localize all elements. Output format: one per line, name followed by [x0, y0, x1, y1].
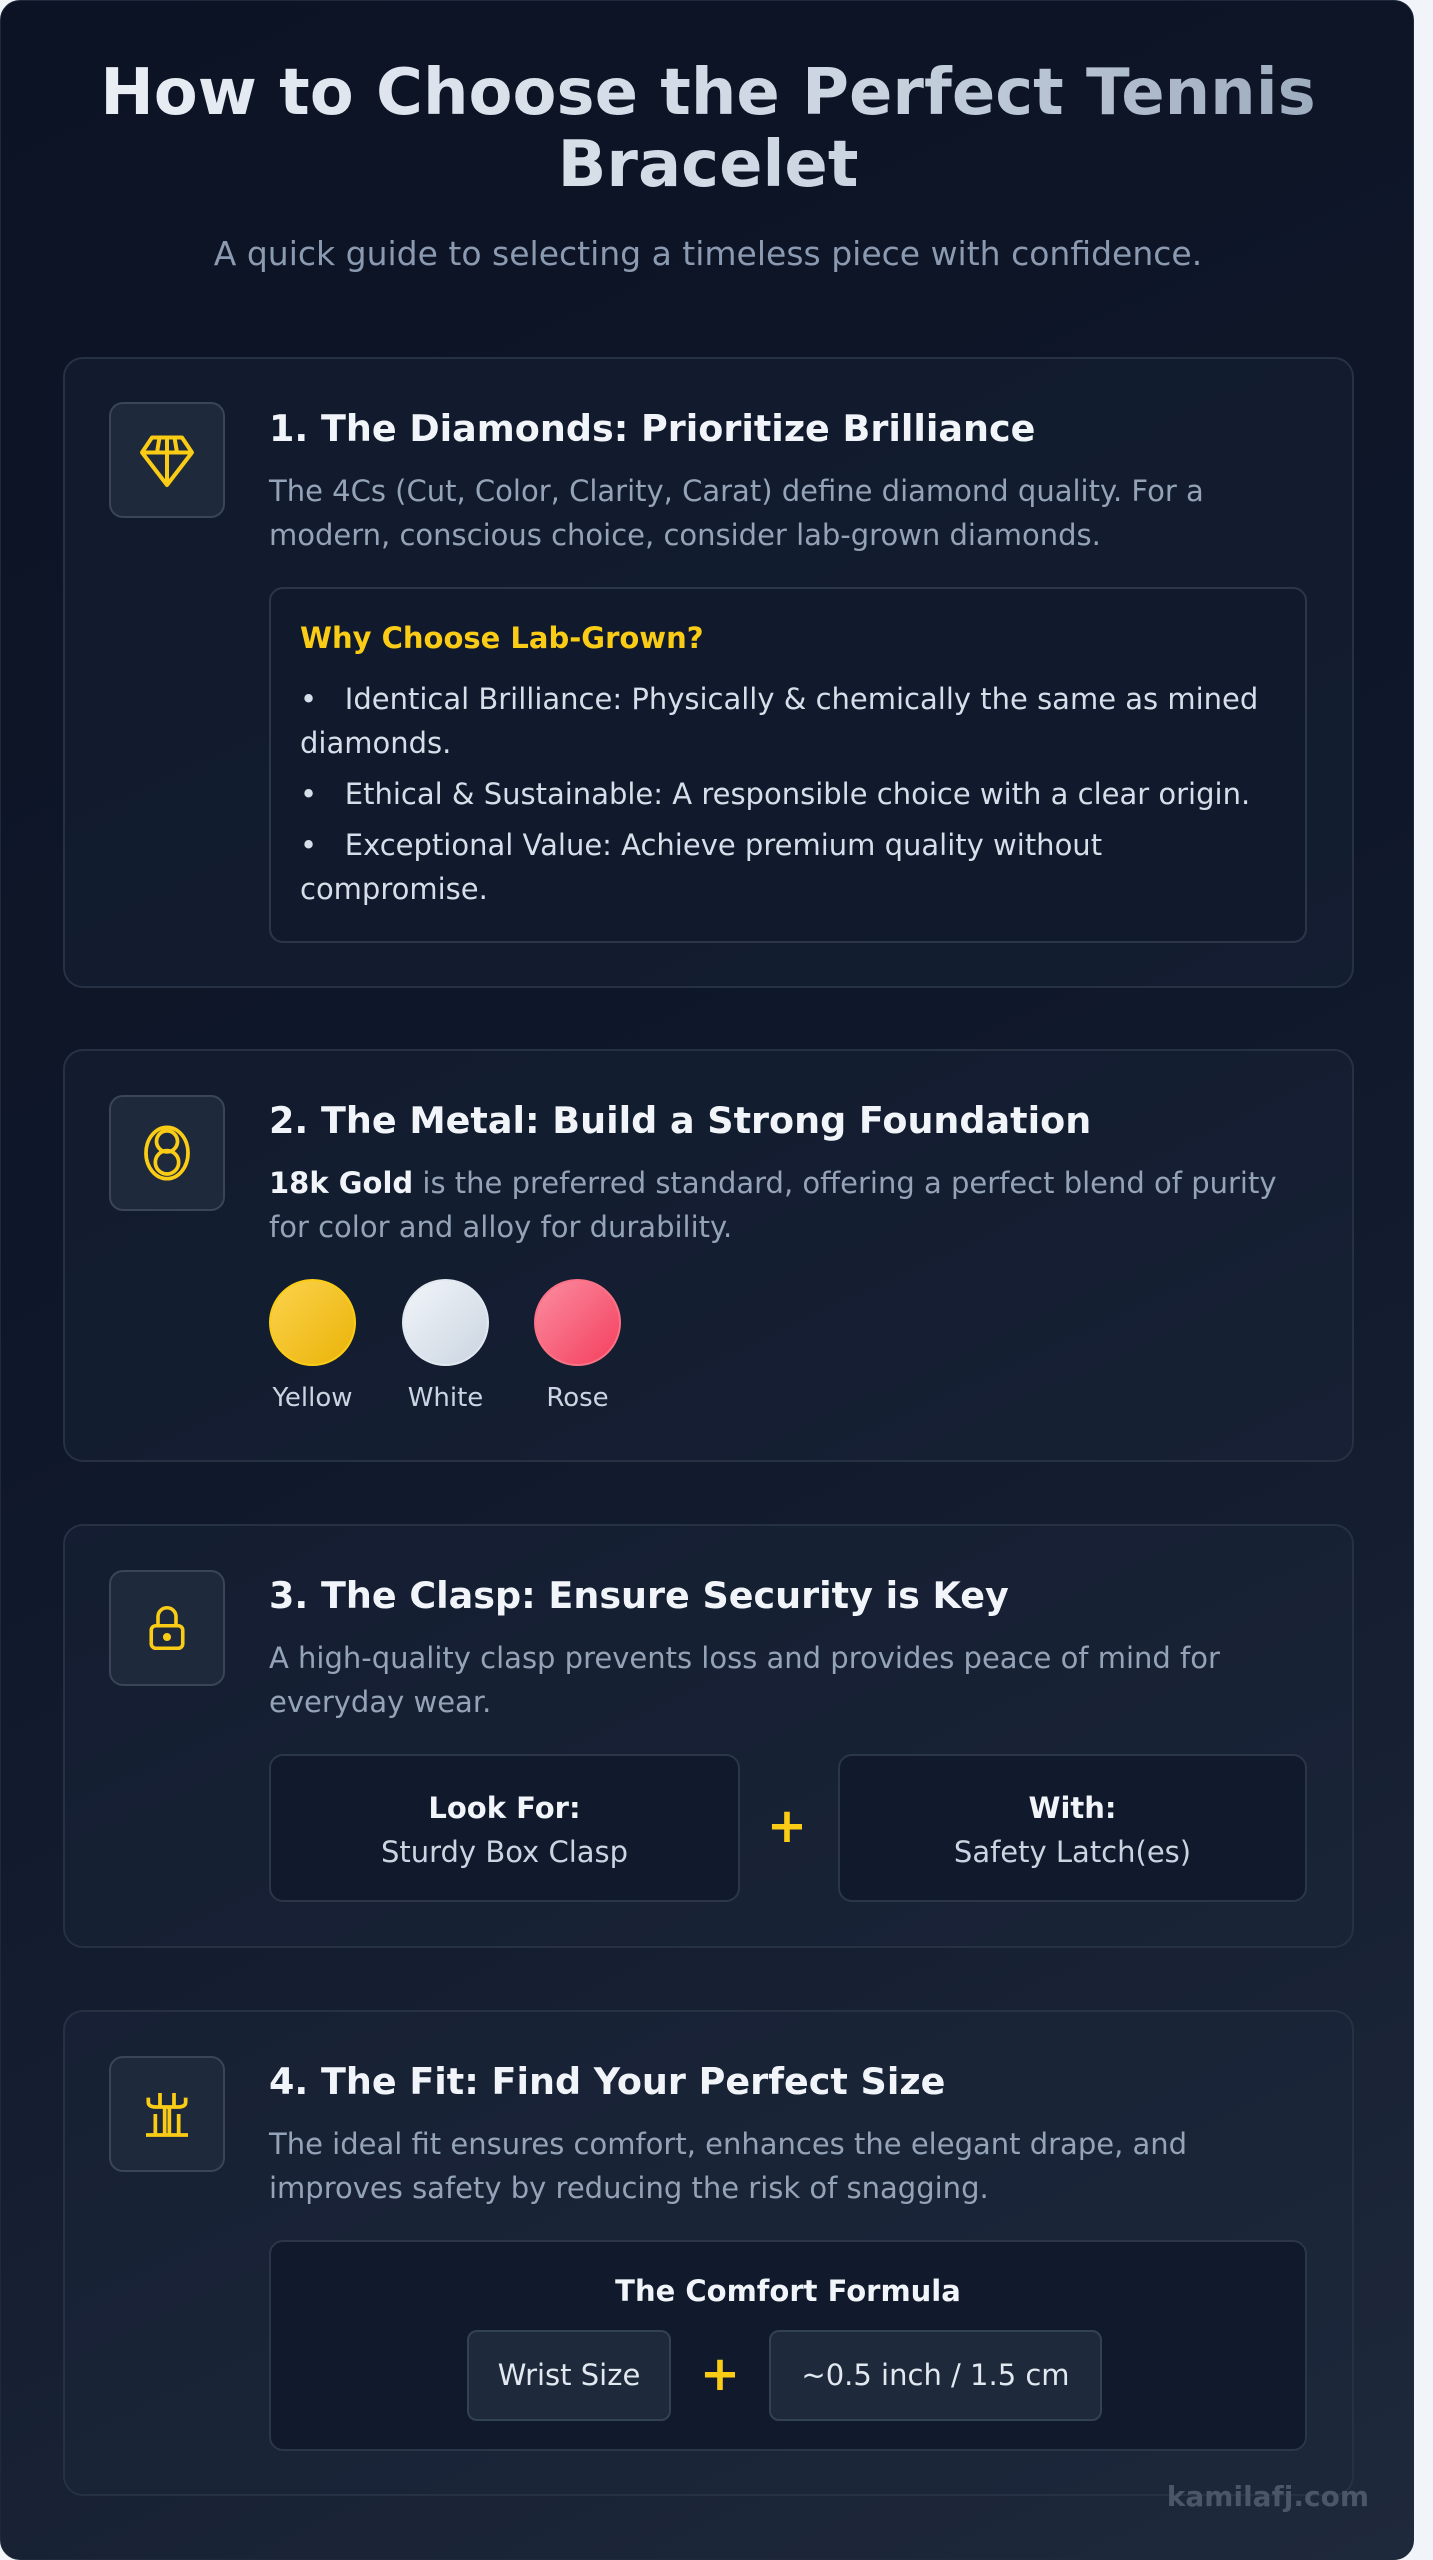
- wrist size: Wrist Size: [498, 2358, 640, 2392]
- heading: 4. The Fit: Find Your Perfect Size: [269, 2060, 945, 2103]
- title: [1, 57, 1415, 201]
- swatch: yellow: Yellow: [272, 1383, 353, 1413]
- watermark: kamilafj.com: [1167, 2480, 1369, 2513]
- bullet list: • Ethical & Sustainable: A responsible choice with a clear origin.: [300, 777, 1250, 811]
- allowance: [769, 2330, 1102, 2421]
- bullet list: • Exceptional Value: Achieve premium quality without compromise.: [300, 828, 1102, 906]
- icon: diamond: [109, 402, 225, 518]
- box: look for: Look For:: [428, 1791, 581, 1825]
- box: with: Safety Latch(es): [954, 1835, 1191, 1869]
- description: The ideal fit ensures comfort, enhances the elegant drape, and improves safety by reducing the risk of snagging.: [269, 2127, 1187, 2205]
- allowance: ~0.5 inch / 1.5 cm: [801, 2358, 1070, 2392]
- panel: metal: [63, 1049, 1354, 1462]
- box: with: [838, 1754, 1307, 1902]
- heading: 3. The Clasp: Ensure Security is Key: [269, 1574, 1009, 1617]
- description: A high-quality clasp prevents loss and provides peace of mind for everyday wear.: [269, 1641, 1220, 1719]
- plus: +: [767, 1798, 807, 1854]
- wrist size: [467, 2330, 671, 2421]
- box: with: With:: [1028, 1791, 1117, 1825]
- title: Bracelet: [558, 128, 858, 202]
- swatch: rose: [534, 1279, 621, 1413]
- swatch: white: White: [408, 1383, 483, 1413]
- panel: clasp: [63, 1524, 1354, 1948]
- panel: diamonds: [63, 357, 1354, 988]
- subtitle: A quick guide to selecting a timeless piece with confidence.: [214, 234, 1202, 273]
- plus: +: [700, 2346, 740, 2402]
- callout heading: Why Choose Lab-Grown?: [300, 621, 704, 655]
- callout: lab-grown: [269, 587, 1307, 943]
- swatch: rose: Rose: [546, 1383, 609, 1413]
- swatch: white: [402, 1279, 489, 1413]
- formula title: The Comfort Formula: [615, 2274, 961, 2308]
- swatch: yellow: [269, 1279, 356, 1413]
- heading: 1. The Diamonds: Prioritize Brilliance: [269, 407, 1035, 450]
- panel: fit: [63, 2010, 1354, 2496]
- title: How to Choose the Perfect Tennis: [100, 56, 1316, 130]
- swatches: [269, 1279, 621, 1413]
- description: 18k Gold is the preferred standard, offering a perfect blend of purity for color and alloy for durability.: [269, 1166, 1276, 1244]
- bullet list: • Identical Brilliance: Physically & chemically the same as mined diamonds.: [300, 682, 1258, 760]
- bullet list: [300, 682, 1258, 906]
- description: The 4Cs (Cut, Color, Clarity, Carat) define diamond quality. For a modern, conscious choice, consider lab-grown diamonds.: [269, 474, 1204, 552]
- heading: 2. The Metal: Build a Strong Foundation: [269, 1099, 1091, 1142]
- comfort formula box: [269, 2240, 1307, 2451]
- icon: lock: [109, 1570, 225, 1686]
- box: look for: Sturdy Box Clasp: [381, 1835, 628, 1869]
- icon: fit: [109, 2056, 225, 2172]
- icon: metal rings: [109, 1095, 225, 1211]
- box: look for: [269, 1754, 740, 1902]
